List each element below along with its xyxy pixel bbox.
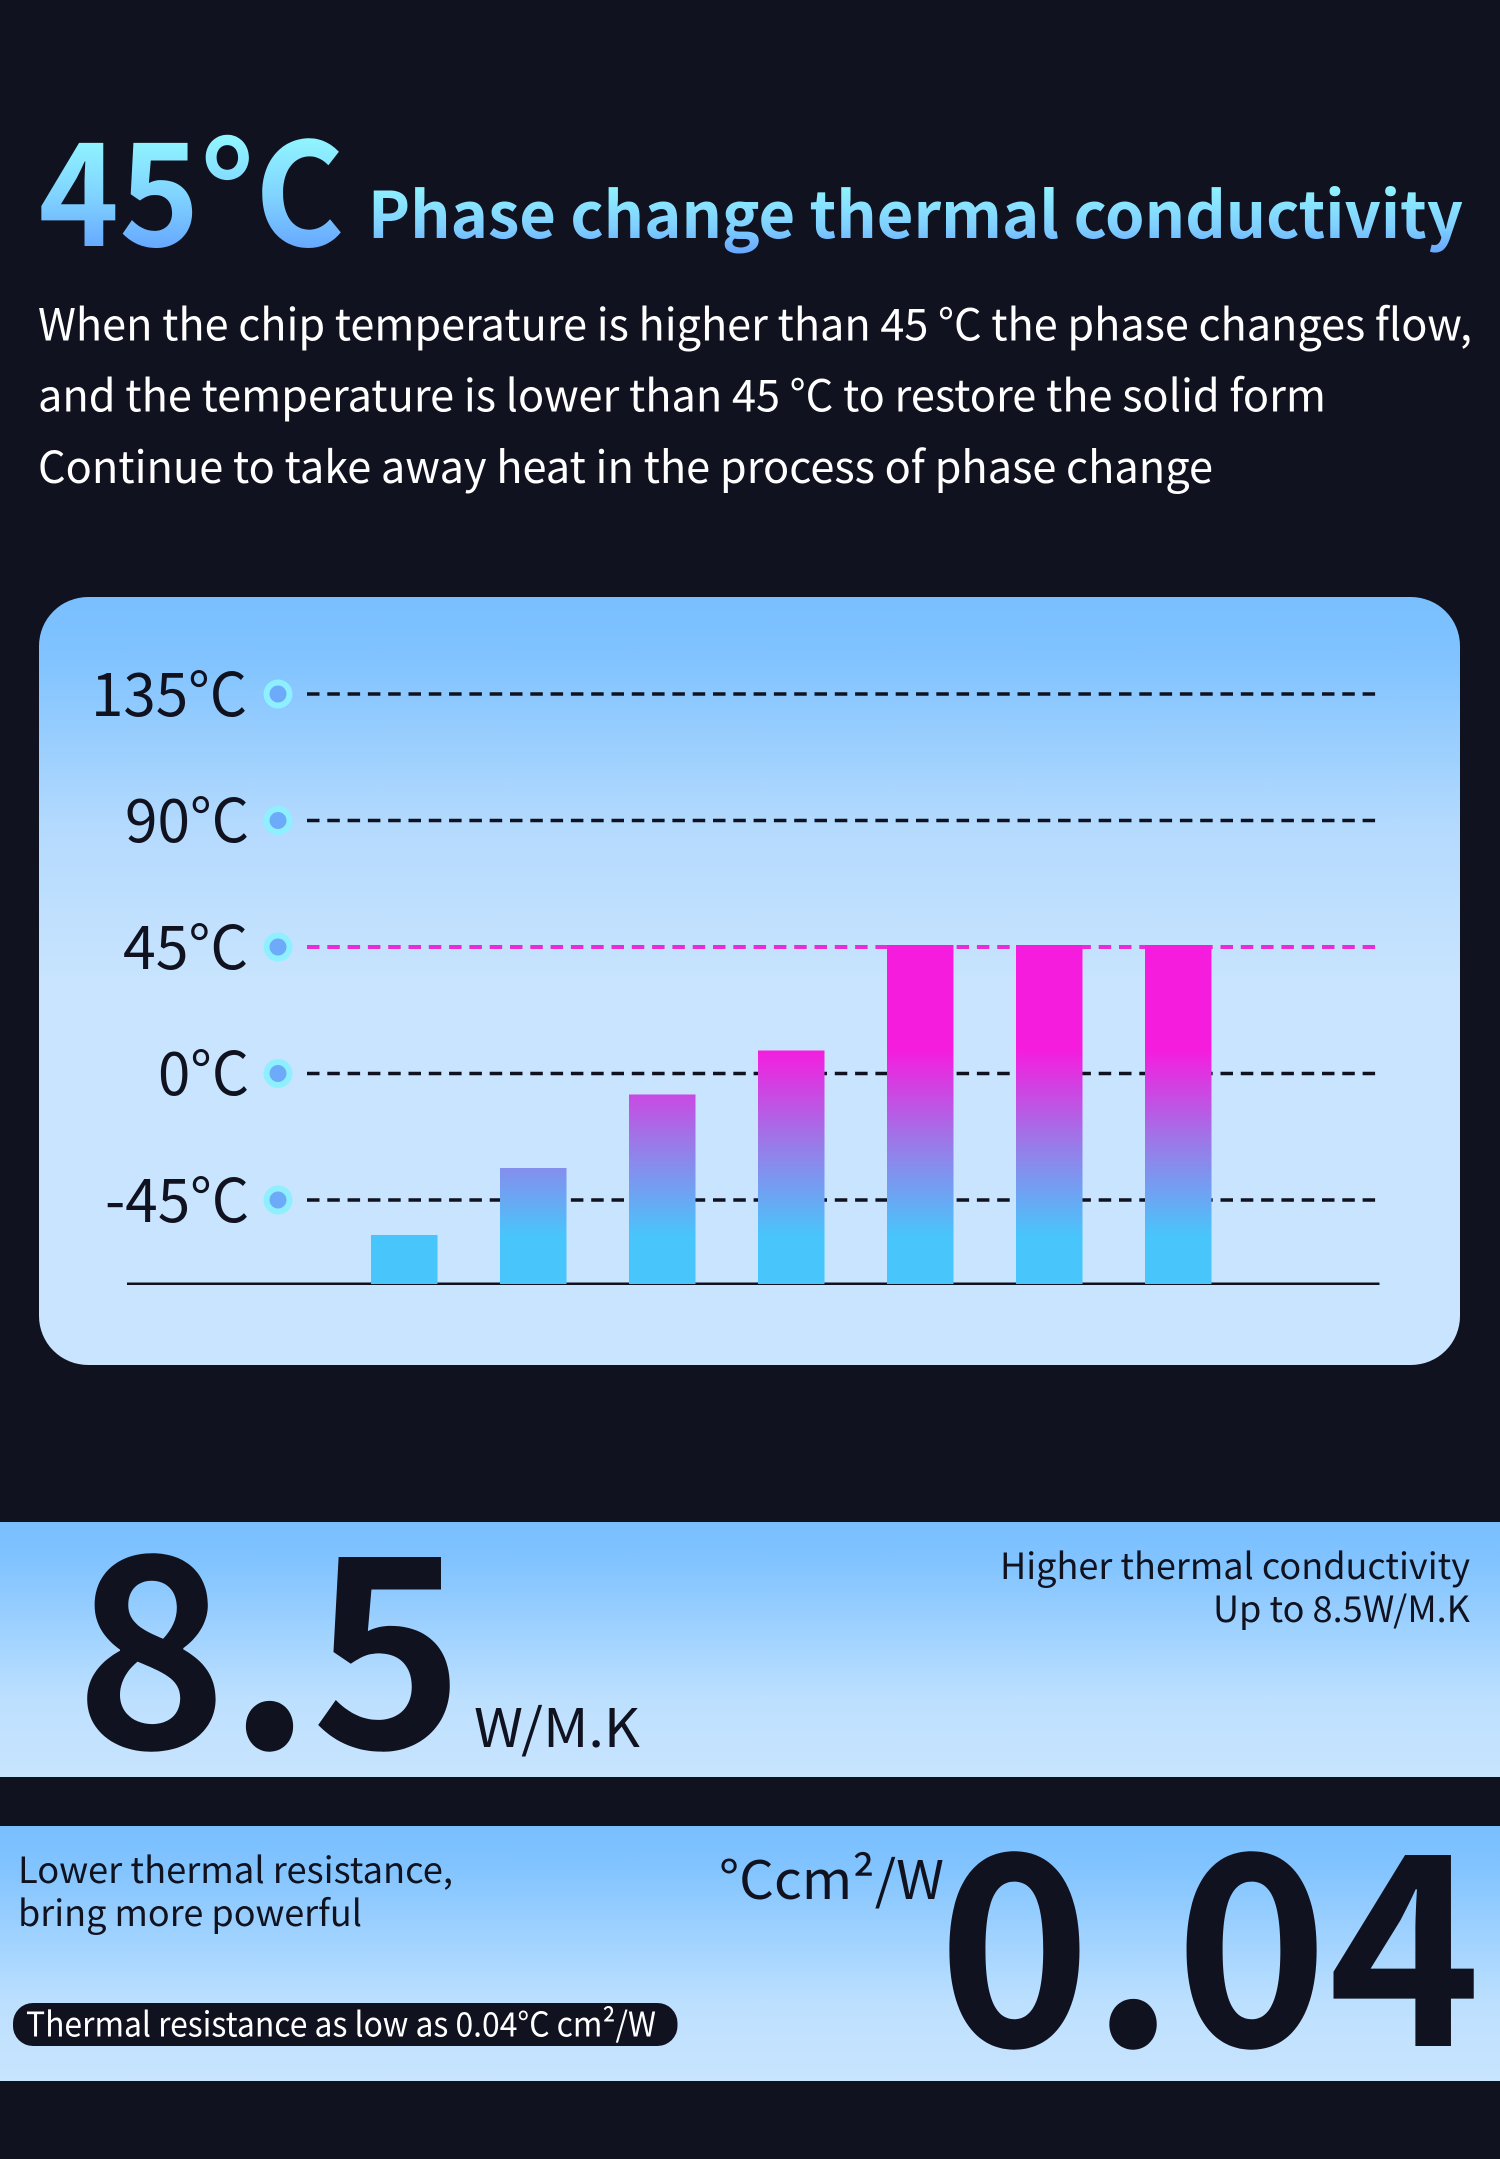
caption: Higher thermal conductivity: [1000, 1538, 1470, 1590]
y axis labels: 135°C: [91, 647, 247, 734]
y axis labels: [91, 647, 249, 1240]
caption: [18, 1842, 453, 1937]
big title: 45°C: 45°C: [38, 81, 344, 288]
caption: bring more powerful: [18, 1885, 362, 1937]
description text: Continue to take away heat in the process of phase change: [38, 432, 1213, 496]
heading: Phase change thermal conductivity: Phase change thermal conductivity: [368, 165, 1463, 257]
axis markers: [264, 680, 292, 1214]
baseline axis: [127, 1282, 1380, 1285]
y axis labels: 45°C: [123, 900, 248, 987]
y axis labels: 0°C: [158, 1026, 249, 1113]
panel: temperature chart: [39, 597, 1460, 1365]
caption: [1000, 1538, 1471, 1633]
big number: 8.5: 8.5: [75, 1442, 464, 1825]
panel: thermal resistance band: [0, 1740, 1500, 2123]
big number: 0.04: 0.04: [938, 1740, 1481, 2123]
bars: [371, 945, 1212, 1284]
panel: thermal conductivity band: [0, 1442, 1500, 1825]
unit: W/M.K: W/M.K: [474, 1687, 641, 1763]
dashed grid lines: [307, 694, 1376, 1200]
caption: Lower thermal resistance,: [18, 1842, 453, 1894]
description text: [38, 290, 1472, 496]
y axis labels: -45°C: [105, 1153, 249, 1240]
caption: Up to 8.5W/M.K: [1213, 1581, 1471, 1633]
y axis labels: 90°C: [125, 773, 249, 860]
pill callout: Thermal resistance as low as 0.04°C cm²/W: [26, 1998, 656, 2046]
description text: When the chip temperature is higher than 45 °C the phase changes flow,: [38, 290, 1472, 354]
title: [38, 81, 1463, 288]
unit: °Ccm²/W: °Ccm²/W: [719, 1839, 944, 1915]
description text: and the temperature is lower than 45 °C to restore the solid form: [38, 360, 1326, 424]
